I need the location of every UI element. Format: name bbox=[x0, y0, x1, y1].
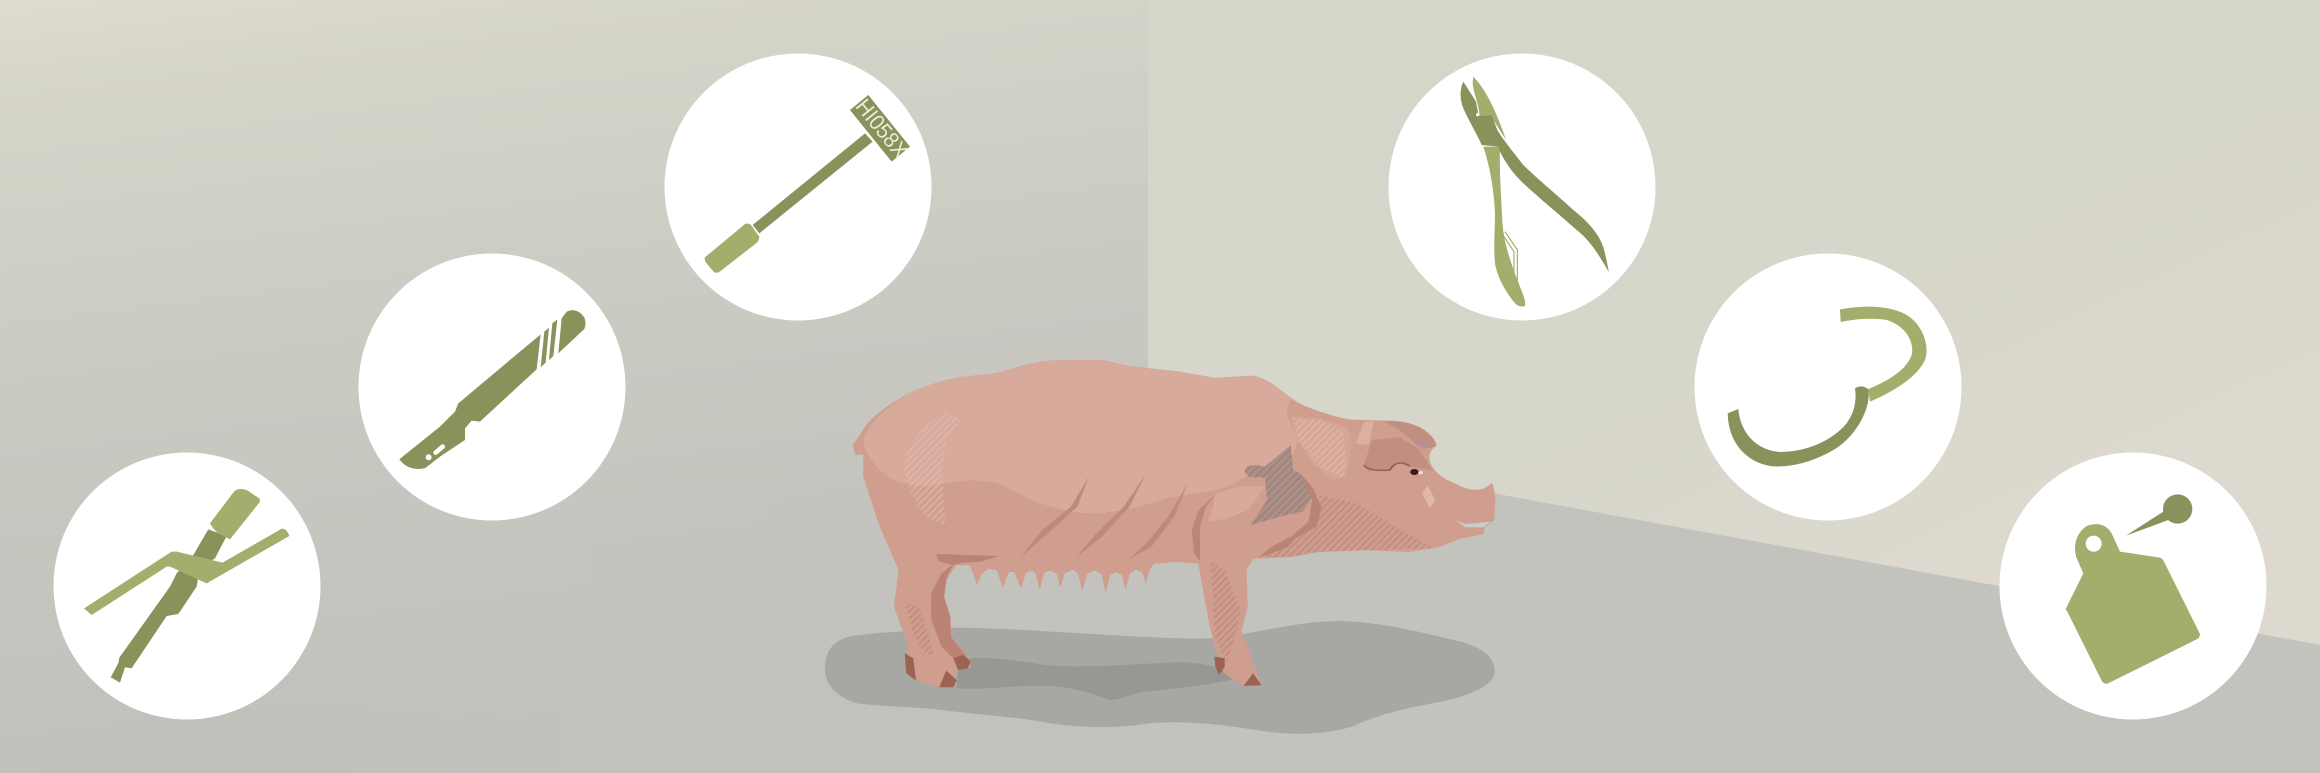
hammer handle grip bbox=[705, 223, 759, 273]
ear tag body bbox=[2066, 524, 2200, 684]
icon: scalpel in circle bbox=[358, 254, 626, 520]
eye bbox=[1410, 469, 1419, 475]
scalpel body bbox=[399, 334, 541, 469]
pig grey skin patch bbox=[1245, 445, 1312, 525]
circle: pliers bbox=[54, 452, 320, 720]
circle: ear tag bbox=[2000, 452, 2266, 720]
circle: tattoo hammer bbox=[664, 54, 932, 320]
circle: side cutters bbox=[1388, 54, 1656, 320]
hatch: rear leg bbox=[905, 602, 934, 658]
hatch: rump bbox=[904, 412, 960, 525]
hatch: neck bbox=[1293, 418, 1346, 478]
pliers drawing bbox=[84, 489, 289, 683]
cutters dark jaw and handle bbox=[1461, 82, 1609, 272]
eye highlight bbox=[1418, 471, 1423, 474]
head highlight streak bbox=[1356, 422, 1374, 445]
pig body silhouette bbox=[853, 360, 1495, 687]
hook dark part bbox=[1728, 386, 1869, 466]
scalpel hole slot bbox=[436, 447, 443, 453]
pig neck fold bbox=[1259, 473, 1321, 557]
hammer head plate bbox=[850, 95, 910, 162]
pig head details bbox=[1356, 421, 1491, 527]
tattoo number: HI058X bbox=[851, 94, 913, 163]
pig with ground shadow bbox=[825, 360, 1495, 734]
background: right wall bbox=[1148, 0, 2320, 645]
cutters light jaw bbox=[1473, 77, 1506, 140]
wrinkle: third bbox=[1129, 483, 1188, 559]
pig shoulder light patch bbox=[1208, 487, 1265, 522]
ear tag drawing bbox=[2066, 494, 2200, 684]
hook drawing bbox=[1728, 307, 1927, 466]
cheek highlight bbox=[1422, 485, 1435, 508]
pig shadow: inner bbox=[956, 658, 1237, 700]
icon: side cutters in circle bbox=[1388, 54, 1656, 320]
icon: hook in circle bbox=[1694, 254, 1962, 520]
ear bbox=[1384, 421, 1436, 448]
pig shadow: outer bbox=[825, 621, 1495, 734]
background: left floor plane bbox=[0, 430, 1148, 773]
hatch: jowl bbox=[1265, 495, 1435, 557]
inner ear shade bbox=[1411, 440, 1432, 449]
spring wire bbox=[1504, 232, 1517, 282]
ear tag pin spike bbox=[2126, 512, 2168, 536]
scalpel stripe two bbox=[549, 319, 557, 360]
pig front leg crease bbox=[1192, 495, 1215, 562]
hook light part bbox=[1840, 307, 1927, 402]
hoof: front back bbox=[1214, 657, 1225, 675]
pig hooves bbox=[905, 653, 1262, 687]
side cutters drawing bbox=[1461, 77, 1609, 306]
pig udder fold bbox=[936, 554, 998, 565]
pig wrinkles bbox=[1021, 474, 1188, 559]
tattoo hammer drawing bbox=[705, 94, 913, 273]
pliers light head bbox=[210, 489, 260, 539]
brow line bbox=[1364, 463, 1410, 470]
mouth bbox=[1456, 520, 1491, 527]
scalpel hole round bbox=[426, 454, 432, 460]
pig neck light patch bbox=[1291, 417, 1352, 480]
wrinkle: first bbox=[1021, 477, 1089, 557]
icon: tattoo hammer in circle bbox=[664, 54, 932, 320]
icon: castration pliers in circle bbox=[54, 452, 320, 720]
hoof: rear inner bbox=[953, 655, 971, 670]
cutters pivot bbox=[1476, 113, 1479, 116]
hoof: front front bbox=[1244, 673, 1262, 686]
background: right floor plane bbox=[1148, 430, 2320, 773]
hoof: rear front bbox=[939, 671, 957, 687]
pliers dark arm bbox=[111, 529, 227, 683]
wrinkle: second bbox=[1076, 474, 1146, 557]
hatch: grey patch bbox=[1245, 445, 1312, 525]
circle: hook bbox=[1694, 254, 1962, 520]
pliers light cross arm bbox=[84, 529, 289, 615]
hammer shaft bbox=[753, 133, 873, 233]
ear tag pin head bbox=[2163, 494, 2192, 524]
ear tag hole bbox=[2086, 536, 2102, 552]
cutters light handle bbox=[1483, 147, 1525, 306]
circle: scalpel bbox=[358, 254, 626, 520]
scalpel handle end bbox=[558, 310, 585, 353]
scalpel stripe one bbox=[541, 328, 549, 367]
hoof: rear back bbox=[905, 653, 916, 681]
hatch: front leg bbox=[1211, 562, 1241, 663]
ear base dark patch bbox=[1364, 437, 1432, 472]
pig rear inner leg shade bbox=[931, 564, 970, 661]
scalpel drawing bbox=[399, 310, 585, 469]
pig upper back highlight bbox=[864, 360, 1298, 513]
icon: ear tag in circle bbox=[2000, 452, 2266, 720]
